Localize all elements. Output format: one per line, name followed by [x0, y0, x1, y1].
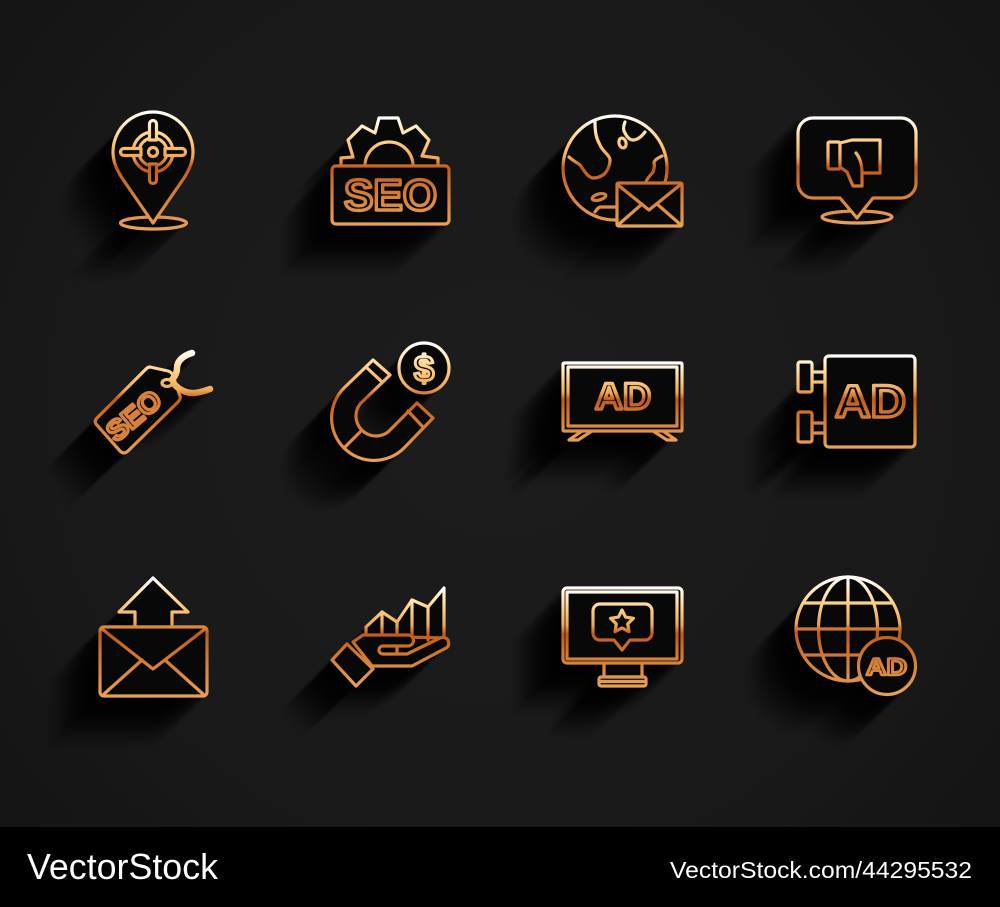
icon: SEO price tag: SEO [100, 384, 168, 448]
icon: SEO price tag [95, 353, 210, 453]
footer image id text: VectorStock.com/44295532 [670, 857, 972, 883]
icon: location pin with target [113, 112, 193, 229]
icon: SEO gear sign [332, 118, 449, 224]
icon: envelope with upward arrow [100, 578, 207, 696]
icon: globe with AD badge: AD [866, 654, 907, 681]
icon: thumbs down speech bubble [798, 118, 916, 223]
icon: globe with envelope [563, 116, 682, 226]
icon: magnet attracting a dollar coin [332, 343, 449, 460]
icon: globe with AD badge [796, 577, 916, 694]
icon: desktop monitor with star speech bubble [563, 588, 682, 686]
icon: hanging AD signboard [798, 356, 915, 447]
icon: television showing AD: AD [595, 376, 651, 417]
icon: hand holding rising chart [332, 588, 449, 686]
icon: television showing AD [563, 363, 682, 440]
footer logo text: VectorStock [27, 846, 219, 887]
icon: SEO gear sign: SEO [344, 171, 437, 220]
footer bar [0, 827, 1000, 907]
icon: magnet attracting a dollar coin: $ [414, 348, 434, 389]
long diagonal shadows behind the icons [41, 115, 913, 750]
icon: hanging AD signboard: AD [835, 376, 906, 427]
